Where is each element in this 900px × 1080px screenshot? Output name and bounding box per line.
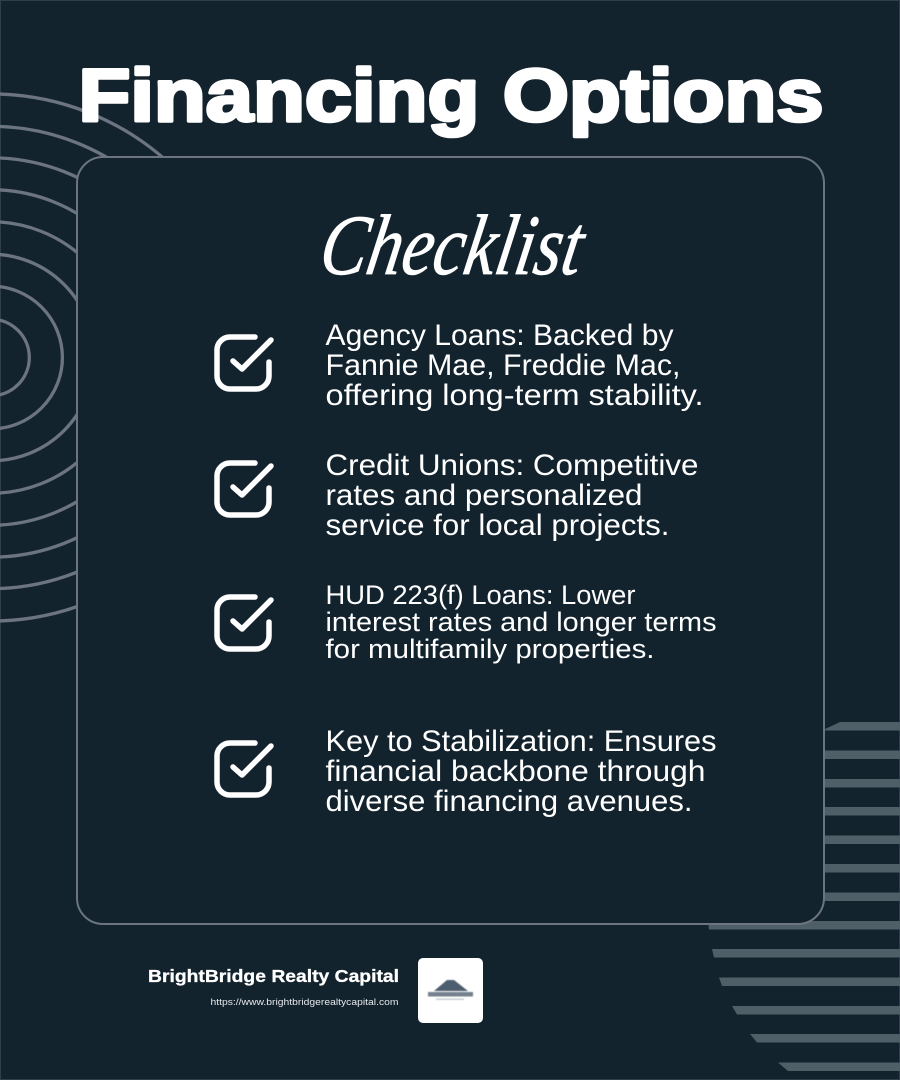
text block — [326, 319, 704, 412]
text block: for multifamily properties. — [326, 634, 654, 664]
item: Credit Unions — [217, 449, 698, 542]
panel: checklist — [77, 157, 824, 924]
icon: checkbox — [217, 337, 271, 389]
text block: offering long-term stability. — [326, 379, 704, 412]
text block: Credit Unions: Competitive — [326, 449, 698, 482]
title: Financing Options — [78, 54, 824, 137]
heading: Checklist: Checklist — [314, 198, 593, 293]
text block: Agency Loans: Backed by — [326, 319, 674, 352]
text block: interest rates and longer terms — [326, 607, 716, 637]
icon: checkbox — [217, 597, 271, 649]
text block — [326, 580, 716, 664]
text block: diverse financing avenues. — [326, 785, 692, 818]
item: Key to Stabilization — [217, 725, 716, 818]
text block: service for local projects. — [326, 509, 670, 542]
company name: BrightBridge Realty Capital — [148, 966, 399, 986]
item: HUD 223(f) Loans — [217, 580, 716, 664]
text block: financial backbone through — [326, 755, 706, 788]
text block: HUD 223(f) Loans: Lower — [326, 580, 636, 610]
text block: Fannie Mae, Freddie Mac, — [326, 349, 680, 382]
logo — [418, 958, 483, 1023]
decorative concentric circles — [0, 94, 255, 621]
text block — [326, 449, 698, 542]
icon: checkbox — [217, 743, 271, 795]
item: Agency Loans — [217, 319, 704, 412]
text block: Key to Stabilization: Ensures — [326, 725, 716, 758]
icon: checkbox — [217, 463, 271, 515]
text block: rates and personalized — [326, 479, 642, 512]
decorative stripes — [708, 722, 900, 1071]
website url: https://www.brightbridgerealtycapital.com — [210, 997, 398, 1007]
text block — [326, 725, 716, 818]
footer — [148, 958, 483, 1023]
